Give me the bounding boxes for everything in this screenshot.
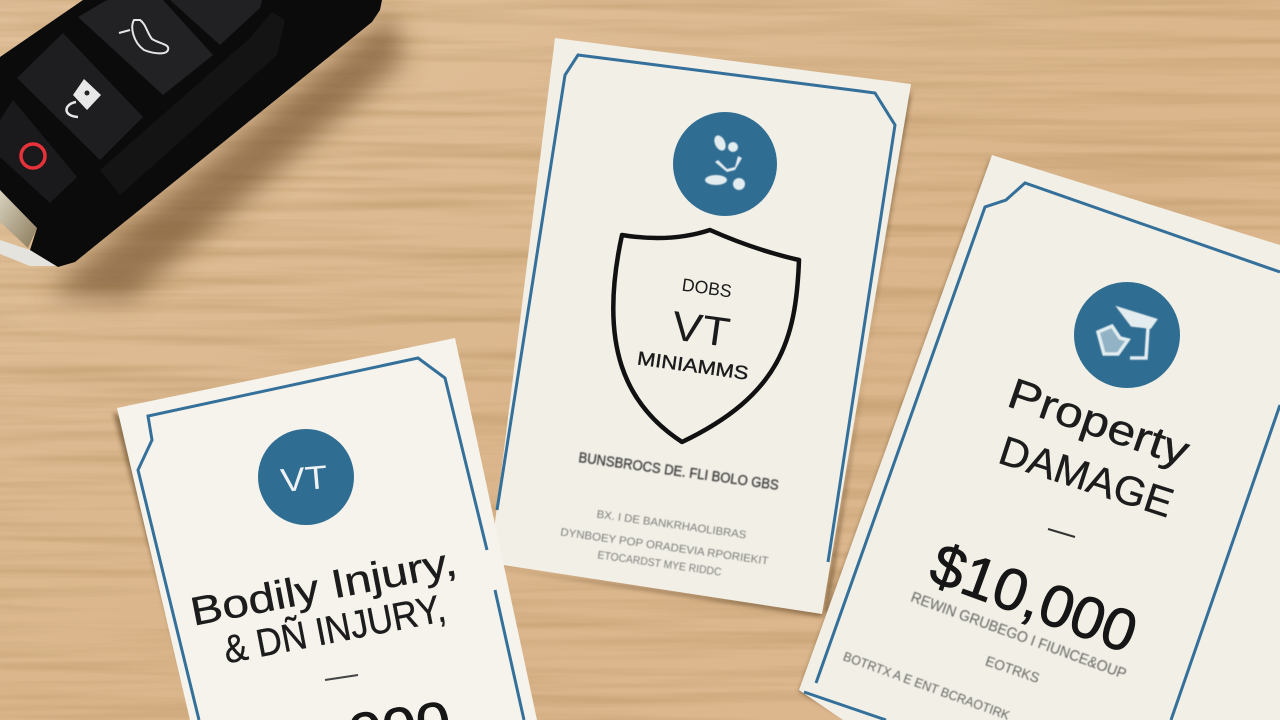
left card heading — [192, 555, 455, 663]
center card small print: DYNBOEY POP ORADEVIA RPORIEKIT — [560, 526, 770, 568]
panel: right card — [799, 155, 1280, 720]
fob metal key tip — [0, 190, 58, 266]
panel: left card — [117, 338, 537, 720]
key fob — [0, 0, 405, 300]
right card small print — [841, 589, 1129, 720]
left card heading: Bodily Injury, — [187, 540, 460, 635]
shield text: VT — [669, 302, 733, 356]
left card icon — [258, 429, 354, 525]
left card dash — [325, 675, 358, 680]
right card heading: Property — [1002, 369, 1196, 476]
center card small print: ETOCARDST MYE RIDDC — [597, 549, 722, 579]
center card subheading: BUNSBROCS DE. FLI BOLO GBS — [577, 449, 780, 494]
right card small print: REWIN GRUBEGO I FIUNCE&OUP — [909, 589, 1129, 683]
right card icon — [1074, 282, 1180, 388]
shield text: MINIAMMS — [636, 348, 750, 385]
center card small print — [560, 509, 770, 579]
center shield — [613, 230, 799, 442]
right card heading — [999, 378, 1190, 518]
shield text: DOBS — [681, 275, 733, 301]
center card border — [497, 55, 895, 562]
center card icon — [673, 112, 777, 216]
fob button: lock — [17, 33, 143, 160]
right card small print: EOTRKS — [984, 653, 1042, 686]
right card heading: DAMAGE — [994, 427, 1179, 526]
panel: center card — [490, 38, 911, 614]
right card dash — [1048, 529, 1075, 537]
left card border — [138, 358, 524, 720]
fob button: top — [170, 0, 262, 45]
left card icon: VT — [279, 458, 329, 499]
right card border — [804, 183, 1280, 720]
center card small print: BX. I DE BANKRHAOLIBRAS — [596, 509, 747, 541]
shield text — [638, 278, 748, 380]
fob button: trunk — [78, 0, 213, 95]
left card heading: & DÑ INJURY, — [220, 587, 449, 672]
card shadows — [113, 90, 1000, 720]
fob button: red power — [0, 100, 77, 203]
right card amount: $10,000 — [922, 531, 1146, 666]
